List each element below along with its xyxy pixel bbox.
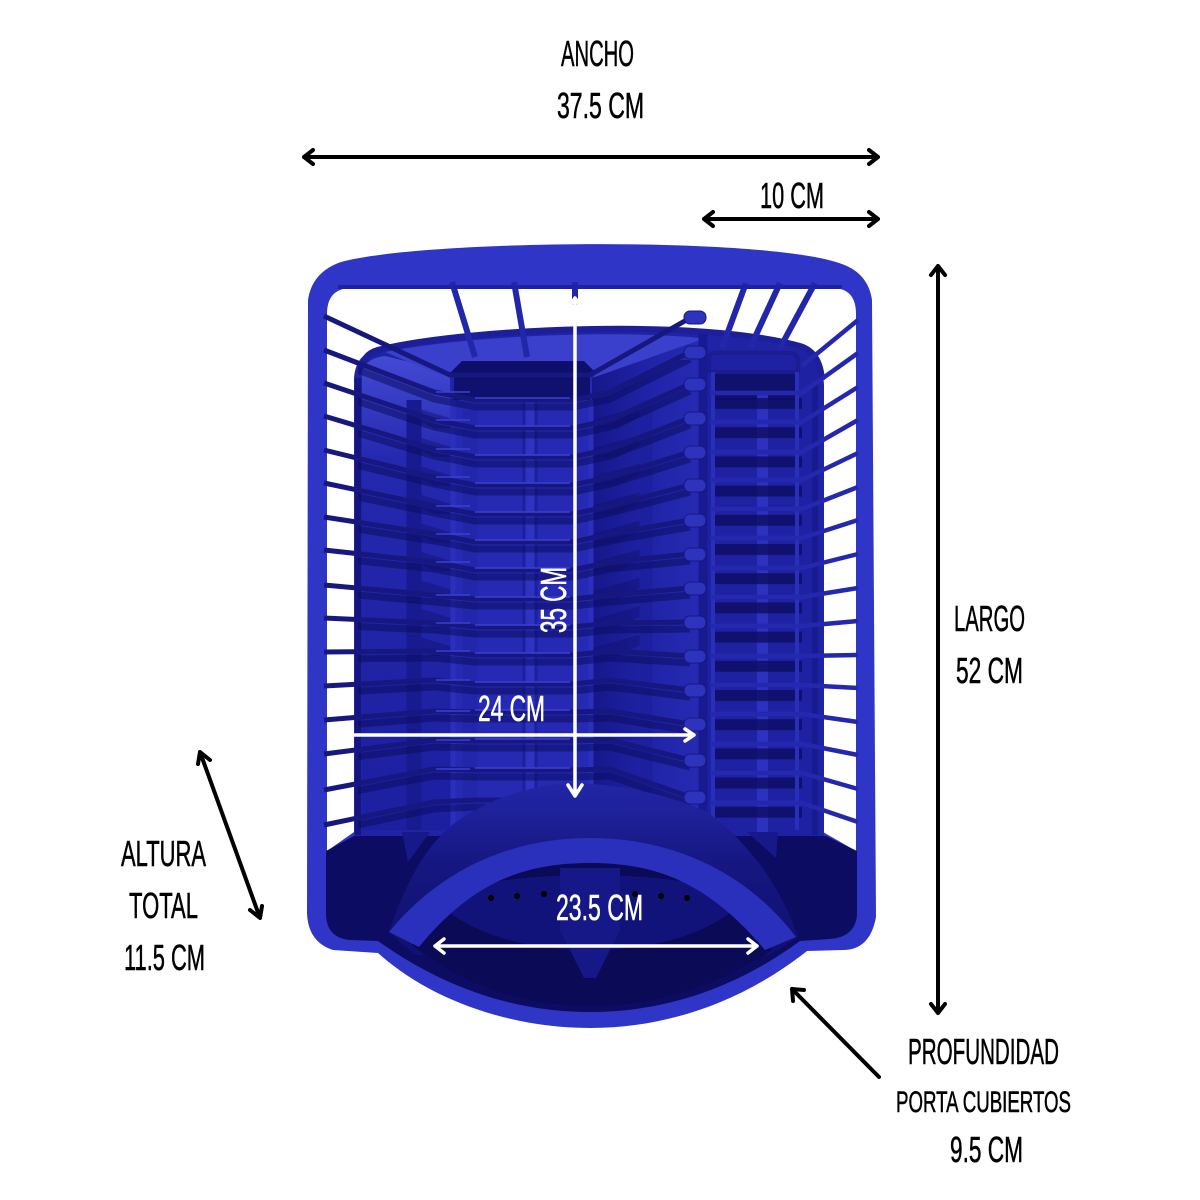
arrow: 35 cm bbox=[568, 298, 582, 796]
floor supports bbox=[358, 330, 815, 835]
label: altura total: 11.5 CM bbox=[124, 937, 205, 978]
central plate rods bbox=[324, 316, 690, 825]
floor dark top recess bbox=[454, 370, 590, 400]
drainer outer body bbox=[307, 244, 876, 1028]
arrow: largo bbox=[931, 266, 945, 1013]
label: largo bbox=[954, 598, 1025, 691]
cutlery compartment rods bbox=[710, 320, 858, 822]
back dark bar bbox=[450, 361, 594, 380]
tray back wall bbox=[385, 334, 700, 380]
inner tray bbox=[354, 329, 824, 850]
top frame line bbox=[338, 285, 842, 289]
corner triangles bbox=[402, 832, 778, 862]
arrow: 24 cm bbox=[350, 729, 694, 741]
top short rods bbox=[452, 282, 815, 357]
right slope shadows bbox=[592, 400, 642, 656]
product: blue dish drainer bbox=[307, 244, 876, 1028]
arrow: ancho width bbox=[304, 150, 878, 164]
rod highlights bbox=[436, 392, 570, 769]
rod shadows bbox=[358, 360, 692, 828]
drain holes bbox=[488, 891, 690, 901]
cutlery compartment bbox=[705, 350, 822, 840]
inner tray curve bbox=[440, 875, 740, 950]
label: largo: LARGO bbox=[954, 598, 1025, 639]
compartment rim bbox=[709, 353, 798, 372]
tray right slope bbox=[592, 340, 704, 830]
label: altura total: ALTURA bbox=[121, 833, 206, 874]
label: altura total bbox=[121, 833, 206, 978]
label: profundidad: PORTA CUBIERTOS bbox=[896, 1086, 1071, 1119]
left slope shadows bbox=[410, 400, 456, 656]
arrow: profundidad bbox=[792, 989, 879, 1077]
rod knobs bbox=[684, 311, 706, 804]
compartment interior bbox=[412, 855, 772, 1006]
front arch light band bbox=[389, 838, 796, 950]
compartment shadow bands bbox=[712, 393, 802, 833]
label: profundidad: 9.5 CM bbox=[950, 1129, 1023, 1170]
arrow: 10 cm bbox=[704, 212, 878, 226]
label: 23.5 cm: 23.5 CM bbox=[556, 887, 643, 928]
arrow: altura bbox=[198, 752, 262, 918]
label: 24 cm: 24 CM bbox=[478, 688, 545, 729]
label: largo: 52 CM bbox=[956, 650, 1023, 691]
tray left slope bbox=[362, 356, 454, 830]
centre divider bbox=[560, 868, 620, 978]
label: profundidad bbox=[896, 1031, 1071, 1170]
dark lower basin bbox=[326, 836, 857, 1012]
front arch outer bbox=[389, 783, 798, 955]
label: ancho: ANCHO bbox=[561, 33, 634, 74]
tray rim bbox=[362, 329, 822, 380]
white open window bbox=[327, 288, 856, 851]
tray floor bbox=[454, 372, 594, 832]
label: profundidad: PROFUNDIDAD bbox=[908, 1031, 1059, 1072]
compartment column bbox=[757, 395, 768, 835]
label: 10 cm: 10 CM bbox=[760, 175, 824, 216]
label: altura total: TOTAL bbox=[129, 885, 198, 926]
label: ancho: 37.5 CM bbox=[557, 85, 644, 126]
arrow: 23.5 cm bbox=[435, 939, 757, 953]
compartment dark top bbox=[712, 372, 798, 400]
label: 35 cm: 35 CM bbox=[533, 567, 574, 633]
label: ancho bbox=[557, 33, 644, 126]
